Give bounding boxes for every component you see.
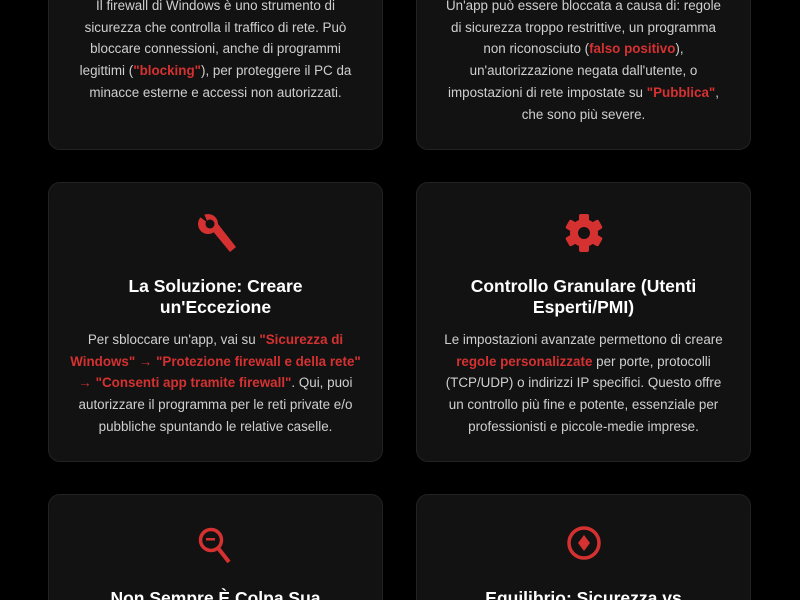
icon: diamond circle bbox=[567, 526, 601, 560]
heading: solution: La Soluzione: Creare un'Eccezione bbox=[128, 276, 303, 317]
text: causes description: Un'app può essere bloccata a causa di: regole di sicurezza troppo restrittive, un programma non riconosciuto (falso positivo), un'autorizzazione negata dall'utente, o impostazioni di rete impostate su "Pubblica", che sono più severe. bbox=[446, 0, 721, 122]
panel: solution bbox=[48, 182, 383, 462]
panel: balance bbox=[416, 494, 751, 600]
icon: wrench bbox=[198, 214, 236, 252]
heading: granular control: Controllo Granulare (Utenti Esperti/PMI) bbox=[471, 276, 696, 317]
panel: granular control bbox=[416, 182, 751, 462]
text: solution description: Per sbloccare un'app, vai su "Sicurezza di Windows" → "Protezione firewall e della rete" → "Consenti app tramite firewall". Qui, puoi autorizzare il programma per le reti private e/o pubbliche spuntando le relative caselle. bbox=[70, 332, 361, 434]
panel: not always its fault bbox=[48, 494, 383, 600]
icon: gear bbox=[566, 214, 602, 252]
text: firewall description: Il firewall di Windows è uno strumento di sicurezza che controlla il traffico di rete. Può bloccare connessioni, anche di programmi legittimi ("blocking"), per proteggere il PC da minacce esterne e accessi non autorizzati. bbox=[80, 0, 351, 100]
icon: magnifier bbox=[198, 528, 230, 564]
text: granular description: Le impostazioni avanzate permettono di creare regole personalizzate per porte, protocolli (TCP/UDP) o indirizzi IP specifici. Questo offre un controllo più fine e potente, essenziale per professionisti e piccole-medie imprese. bbox=[444, 332, 723, 434]
panel: firewall intro bbox=[48, 0, 383, 150]
panel: causes bbox=[416, 0, 751, 150]
